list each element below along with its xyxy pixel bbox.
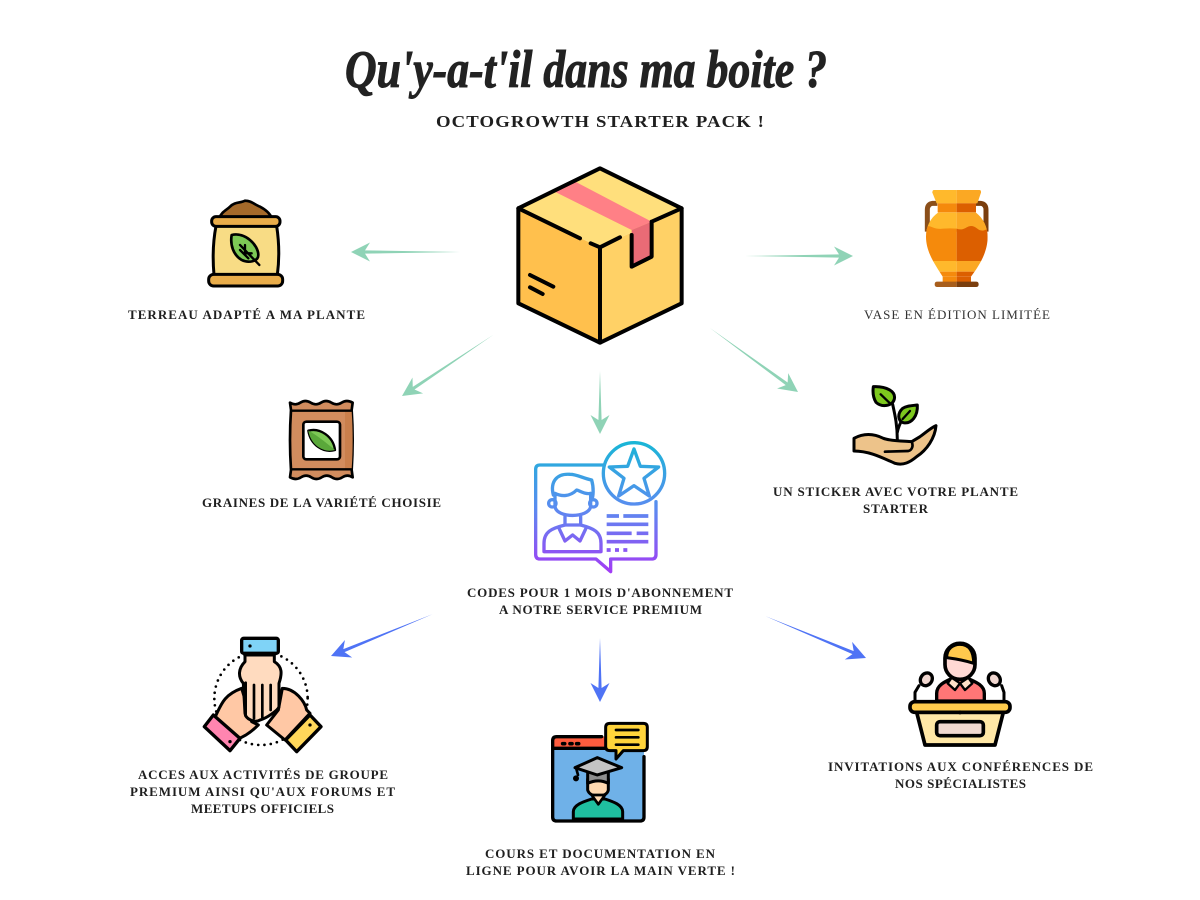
arrow: box to terreau <box>351 242 460 262</box>
label: VASE EN ÉDITION LIMITÉE <box>864 307 1050 322</box>
arrow: premium to group activities <box>327 605 436 665</box>
icon: vase <box>923 190 990 287</box>
item: graines <box>202 401 441 510</box>
item: terreau <box>128 201 365 322</box>
arrow: box to premium codes <box>590 371 610 434</box>
label: INVITATIONS AUX CONFÉRENCES DE <box>828 759 1093 774</box>
title: Qu'y-a-t'il dans ma boite ? <box>345 41 827 99</box>
icon: premium profile <box>536 443 665 572</box>
item: vase <box>864 190 1050 322</box>
item: group activities <box>130 638 395 816</box>
icon: soil bag <box>209 201 283 286</box>
label <box>773 484 1018 516</box>
icon: hand with sprout <box>854 387 936 464</box>
item: sticker <box>773 387 1018 516</box>
icon: seed packet <box>290 401 353 479</box>
label: TERREAU ADAPTÉ A MA PLANTE <box>128 307 365 322</box>
icon: online course <box>553 723 647 821</box>
label <box>828 759 1093 791</box>
label: CODES POUR 1 MOIS D'ABONNEMENT <box>467 585 733 600</box>
item: premium codes <box>467 443 733 617</box>
item: conferences <box>828 643 1093 791</box>
arrow: box to sticker <box>704 320 804 400</box>
label <box>466 846 735 878</box>
label: COURS ET DOCUMENTATION EN <box>485 846 716 861</box>
arrow: premium to courses <box>590 638 610 702</box>
arrow: premium to conferences <box>762 607 870 667</box>
icon: open box <box>518 168 682 343</box>
label: ACCES AUX ACTIVITÉS DE GROUPE <box>138 767 388 782</box>
label: GRAINES DE LA VARIÉTÉ CHOISIE <box>202 495 441 510</box>
label <box>130 767 395 816</box>
subtitle: OCTOGROWTH STARTER PACK ! <box>436 112 765 131</box>
label: UN STICKER AVEC VOTRE PLANTE <box>773 484 1018 499</box>
label <box>467 585 733 617</box>
label: STARTER <box>863 501 929 516</box>
label: A NOTRE SERVICE PREMIUM <box>499 602 702 617</box>
icon: joined hands <box>204 638 321 752</box>
arrow: box to graines <box>397 327 499 404</box>
icon: speaker at podium <box>910 643 1010 745</box>
label: PREMIUM AINSI QU'AUX FORUMS ET <box>130 784 395 799</box>
label: NOS SPÉCIALISTES <box>895 776 1026 791</box>
label: MEETUPS OFFICIELS <box>191 801 334 816</box>
label: LIGNE POUR AVOIR LA MAIN VERTE ! <box>466 863 735 878</box>
arrow: box to vase <box>745 246 853 266</box>
item: courses <box>466 723 735 878</box>
